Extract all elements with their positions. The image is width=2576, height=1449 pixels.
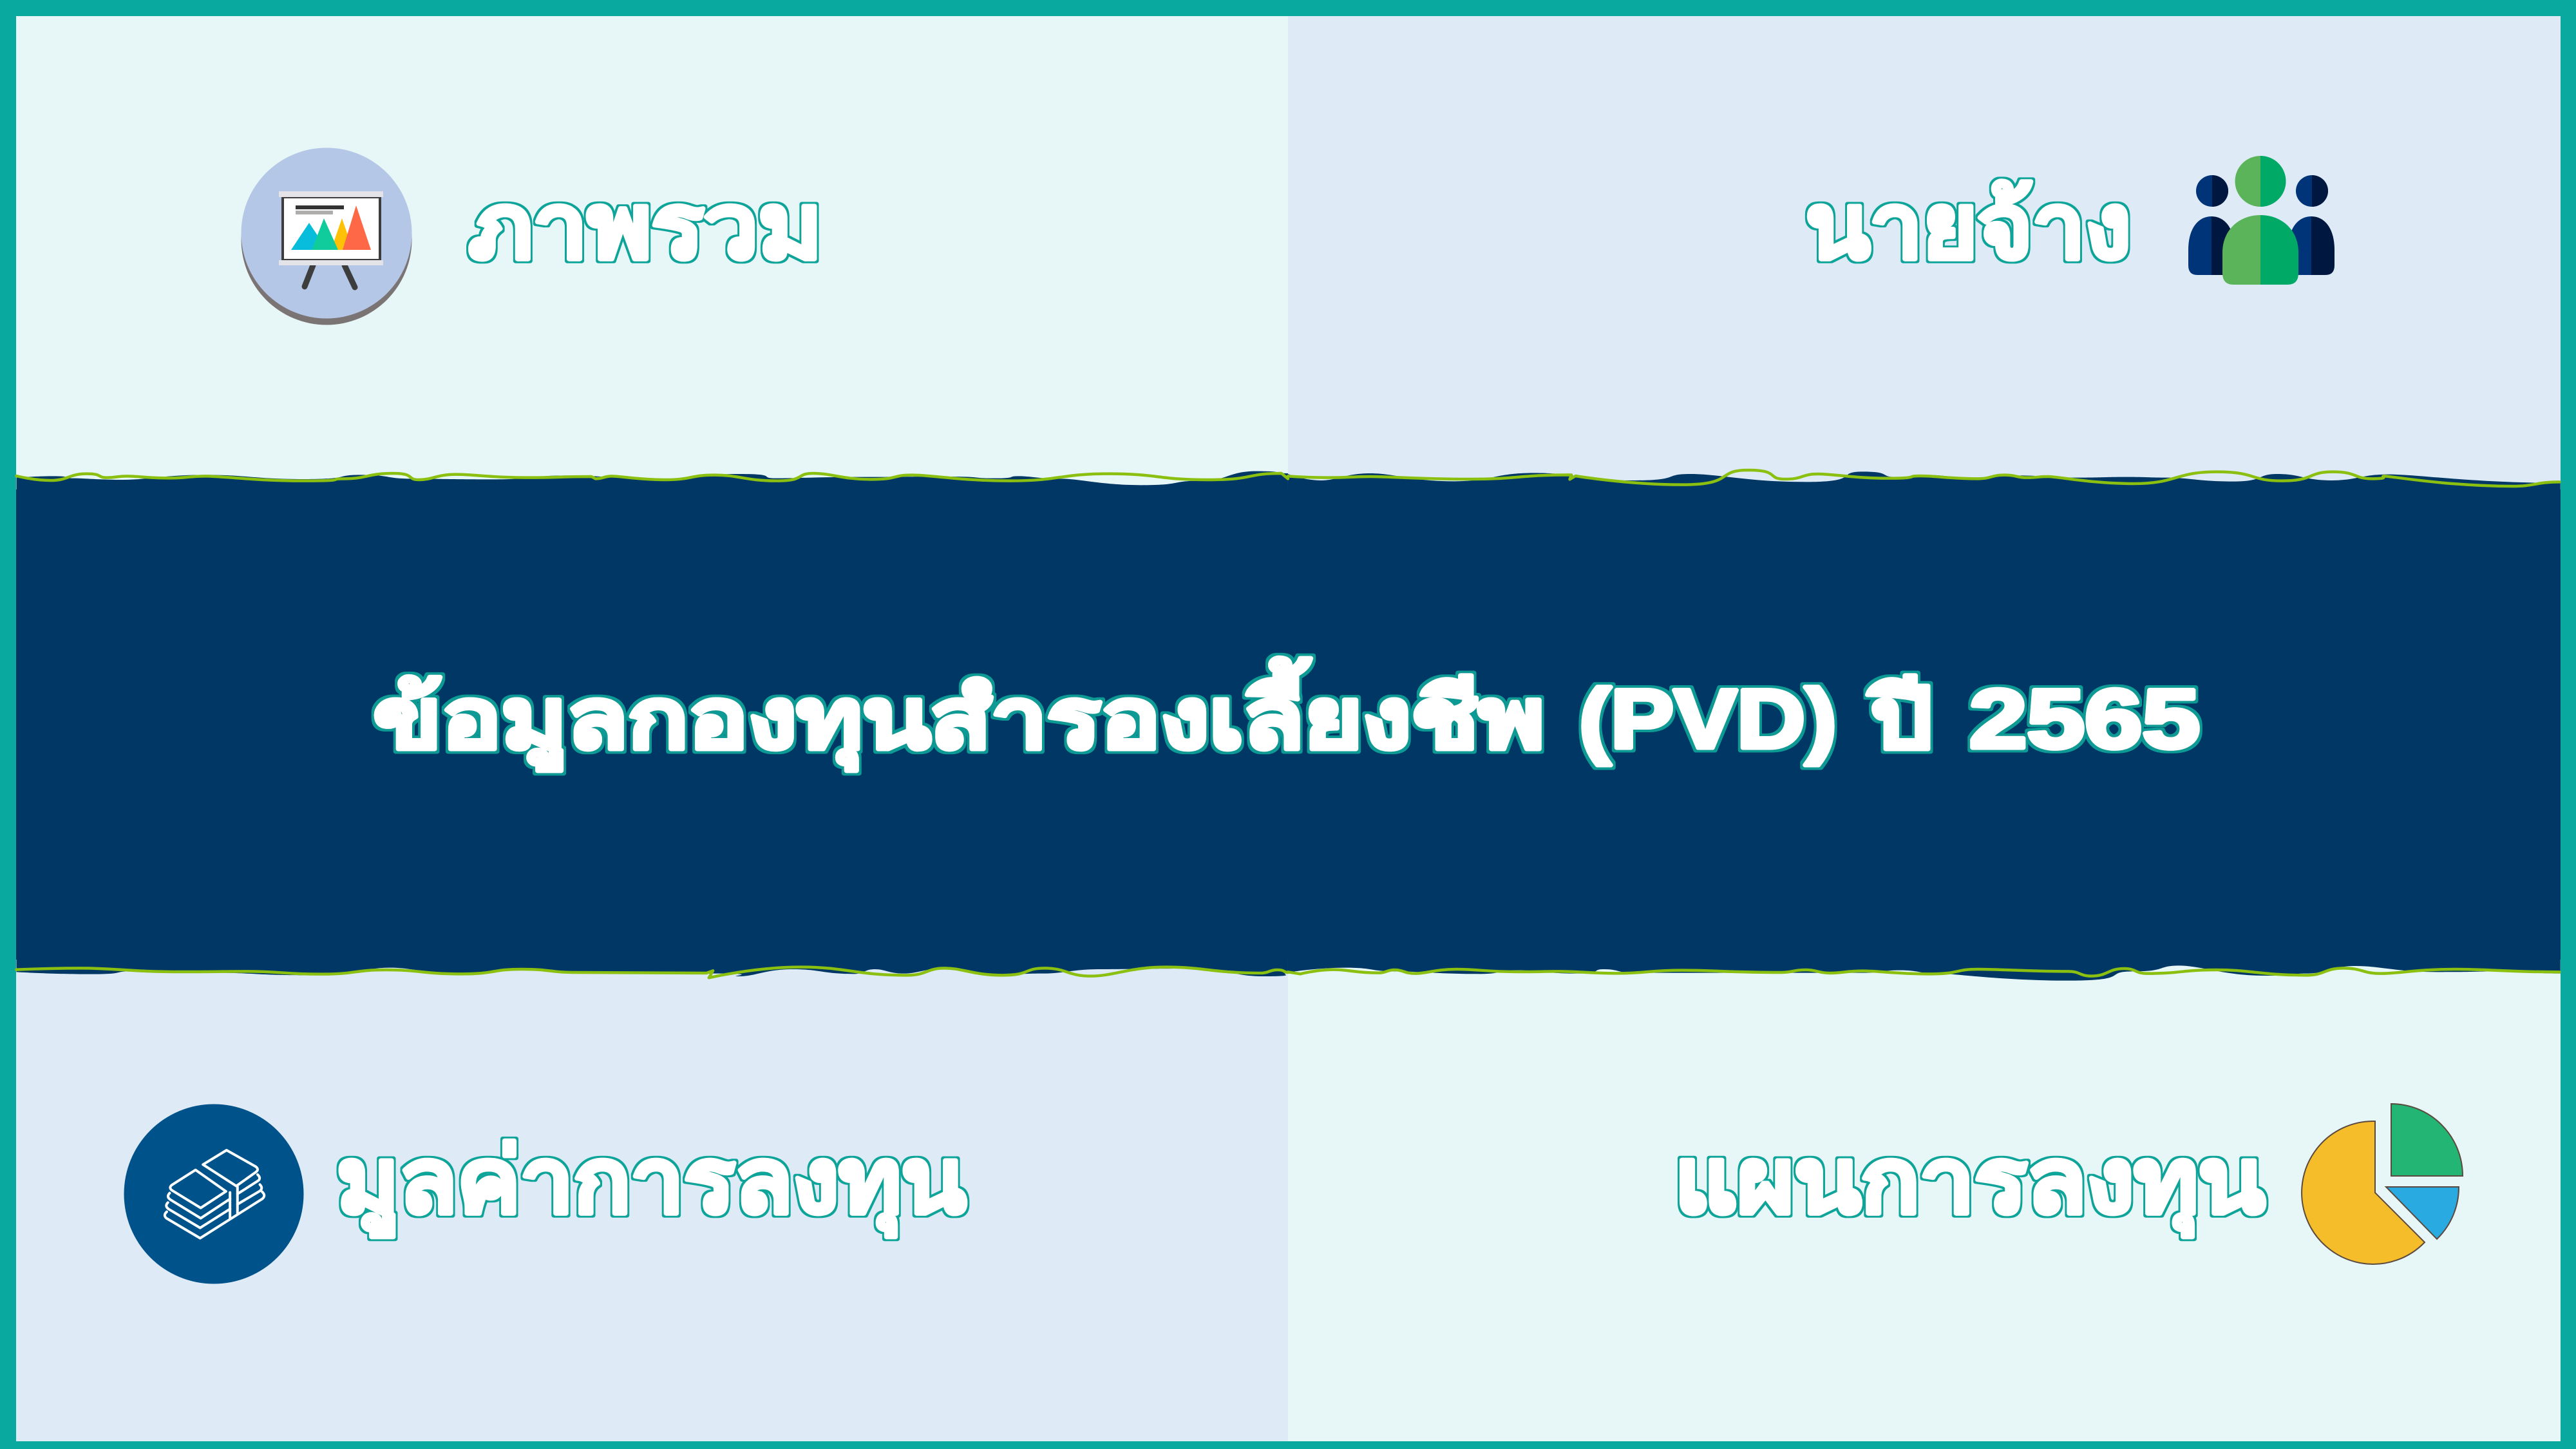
- decorative band edge line: bottom right: [1288, 968, 2559, 976]
- title: [374, 657, 2200, 772]
- title: ปี: [1867, 672, 1932, 766]
- title: ข้อมูลกองทุนสำรองเลี้ยงชีพ: [374, 657, 1544, 772]
- icon: pie chart: [2302, 1104, 2463, 1264]
- heading: employer: นายจ้าง: [1806, 176, 2131, 277]
- panel: overview background: [16, 16, 1288, 724]
- decorative band edge line: top right: [1288, 470, 2559, 486]
- heading: overview: ภาพรวม: [469, 176, 822, 277]
- icon: stack of banknotes: [124, 1104, 304, 1284]
- heading: investment value: มูลค่าการลงทุน: [337, 1130, 966, 1237]
- panel: investment plan background: [1288, 724, 2561, 1441]
- panel: investment value background: [16, 724, 1288, 1441]
- title: 2565: [1969, 672, 2200, 766]
- title band: [16, 471, 2561, 981]
- decorative band edge line: bottom left: [17, 967, 1288, 978]
- heading: investment plan: แผนการลงทุน: [1674, 1130, 2265, 1237]
- icon: presentation board: [241, 148, 412, 325]
- decorative band edge line: top left: [17, 473, 1288, 481]
- icon: people group: [2188, 156, 2334, 285]
- title: (PVD): [1579, 672, 1837, 766]
- panel: employer background: [1288, 16, 2561, 724]
